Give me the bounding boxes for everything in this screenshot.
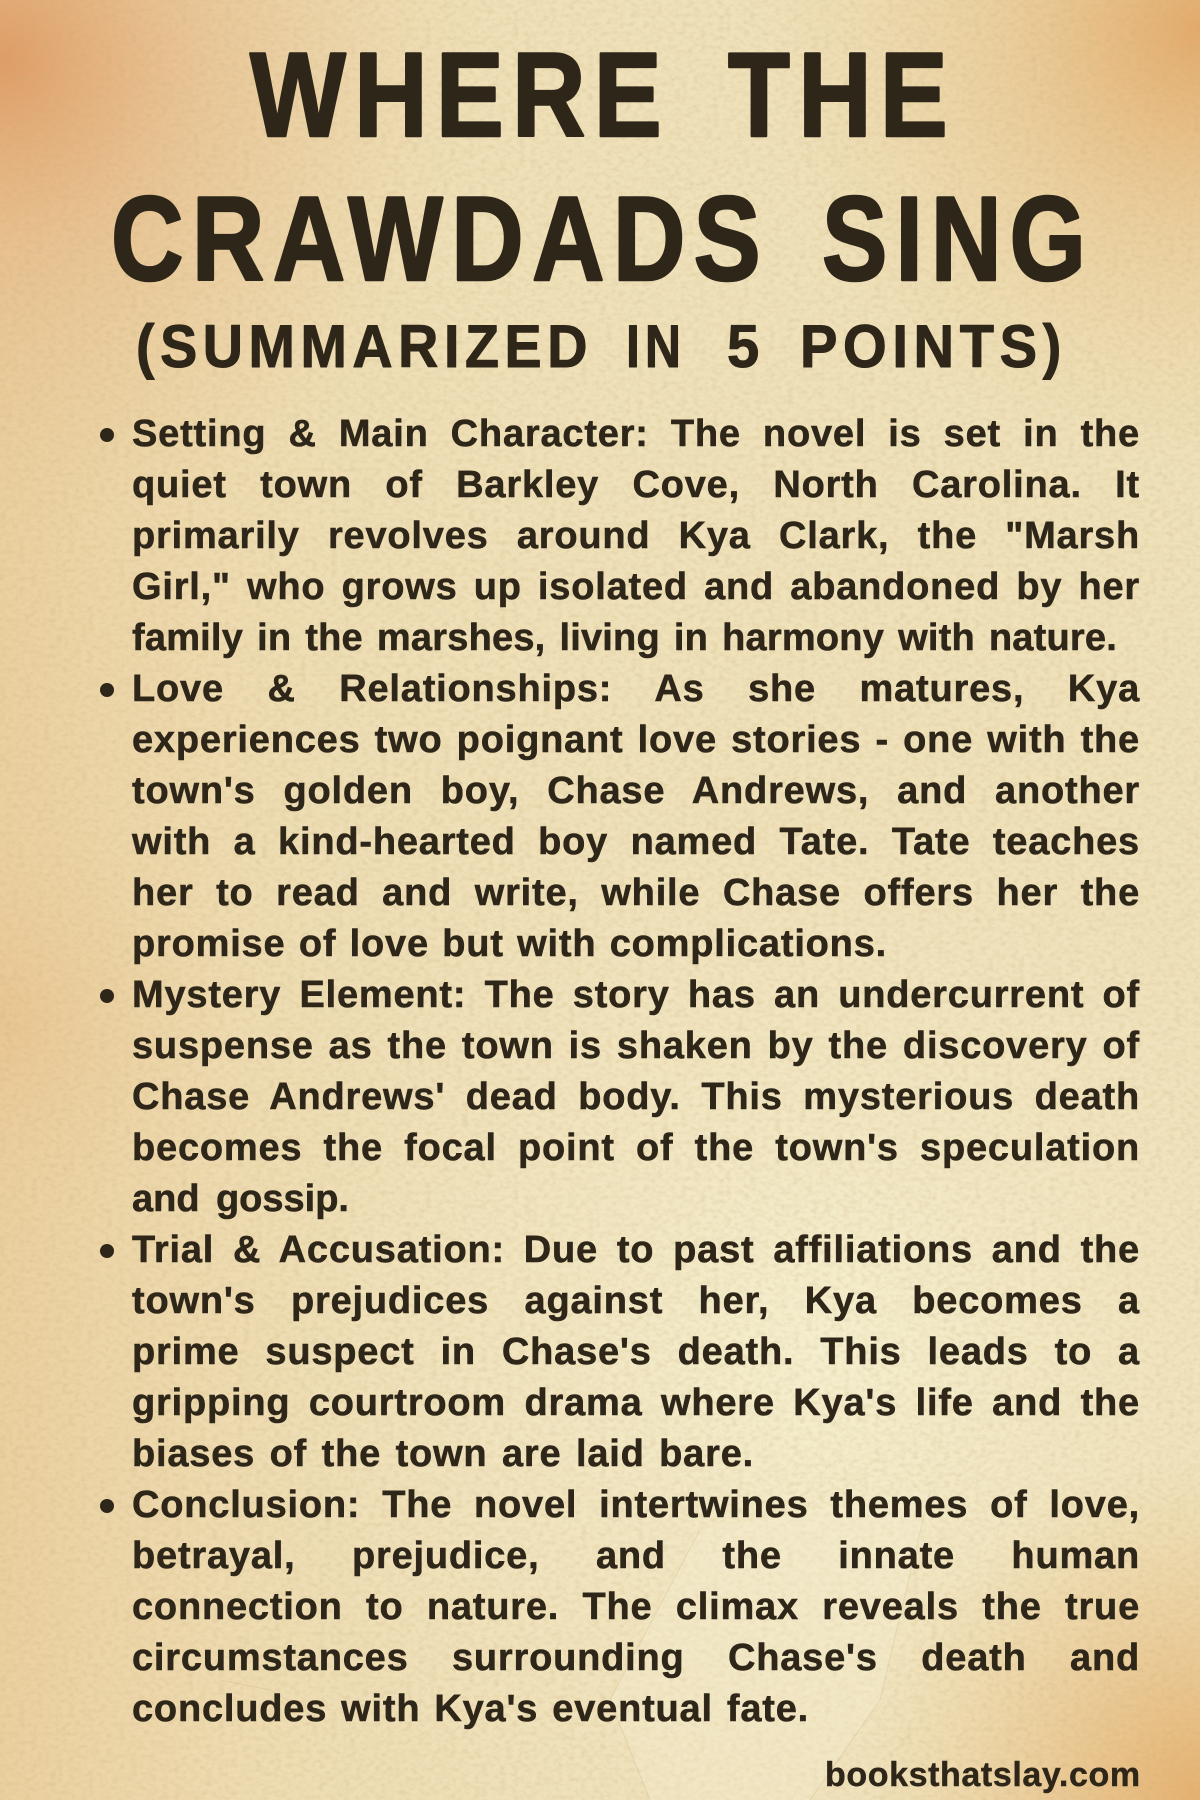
point 4: trial and accusation: Trial & Accusation: Due to past affiliations and the — [132, 1229, 1140, 1271]
point 5: conclusion: Conclusion: The novel intertwines themes of love, — [132, 1484, 1140, 1526]
point 5: conclusion: concludes with Kya's eventual fate. — [132, 1688, 809, 1730]
point 3: mystery element: becomes the focal point of the town's speculation — [132, 1127, 1140, 1169]
point 5: conclusion: circumstances surrounding Chase's death and — [132, 1637, 1140, 1679]
point 2: love and relationships: her to read and write, while Chase offers her the — [132, 872, 1140, 914]
point 1: setting and main character: primarily revolves around Kya Clark, the "Marsh — [132, 515, 1140, 557]
point 1: setting and main character: Girl," who grows up isolated and abandoned by her — [132, 566, 1140, 608]
subtitle: IN — [626, 313, 686, 380]
title line 1: WHERE — [250, 28, 670, 162]
website credit: booksthatslay.com — [825, 1756, 1141, 1794]
point 3: mystery element: Mystery Element: The story has an undercurrent of — [132, 974, 1140, 1016]
title line 2: CRAWDADS — [111, 172, 769, 306]
title line 2: SING — [822, 172, 1094, 306]
subtitle: POINTS) — [800, 313, 1067, 380]
point 5: conclusion: connection to nature. The climax reveals the true — [132, 1586, 1140, 1628]
point 1: setting and main character: family in the marshes, living in harmony with nature. — [132, 617, 1117, 659]
heading block — [111, 28, 1094, 380]
point 5: conclusion: betrayal, prejudice, and the innate human — [132, 1535, 1140, 1577]
point 4: trial and accusation: prime suspect in Chase's death. This leads to a — [132, 1331, 1140, 1373]
point 3: mystery element: and gossip. — [132, 1178, 349, 1220]
subtitle: 5 — [727, 313, 765, 380]
point 3: mystery element: suspense as the town is shaken by the discovery of — [132, 1025, 1140, 1067]
point 4: trial and accusation: biases of the town are laid bare. — [132, 1433, 754, 1475]
point 2: love and relationships: town's golden boy, Chase Andrews, and another — [132, 770, 1140, 812]
point 2: love and relationships — [100, 668, 1140, 965]
point 3: mystery element: Chase Andrews' dead body. This mysterious death — [132, 1076, 1140, 1118]
subtitle — [136, 313, 1067, 380]
title line 1: THE — [728, 28, 956, 162]
point 1: setting and main character — [100, 413, 1140, 659]
point 2: love and relationships: experiences two poignant love stories - one with the — [132, 719, 1140, 761]
point 5: conclusion — [100, 1484, 1140, 1730]
point 4: trial and accusation: town's prejudices against her, Kya becomes a — [132, 1280, 1140, 1322]
point 1: setting and main character: Setting & Main Character: The novel is set in the — [132, 413, 1140, 455]
point 2: love and relationships: promise of love but with complications. — [132, 923, 887, 965]
five point bullet list — [100, 413, 1140, 1730]
point 4: trial and accusation: gripping courtroom drama where Kya's life and the — [132, 1382, 1140, 1424]
point 4: trial and accusation — [100, 1229, 1140, 1475]
point 3: mystery element — [100, 974, 1140, 1220]
point 1: setting and main character: quiet town of Barkley Cove, North Carolina. It — [132, 464, 1140, 506]
subtitle: (SUMMARIZED — [136, 313, 593, 380]
point 2: love and relationships: Love & Relationships: As she matures, Kya — [132, 668, 1140, 710]
point 2: love and relationships: with a kind-hearted boy named Tate. Tate teaches — [132, 821, 1140, 863]
